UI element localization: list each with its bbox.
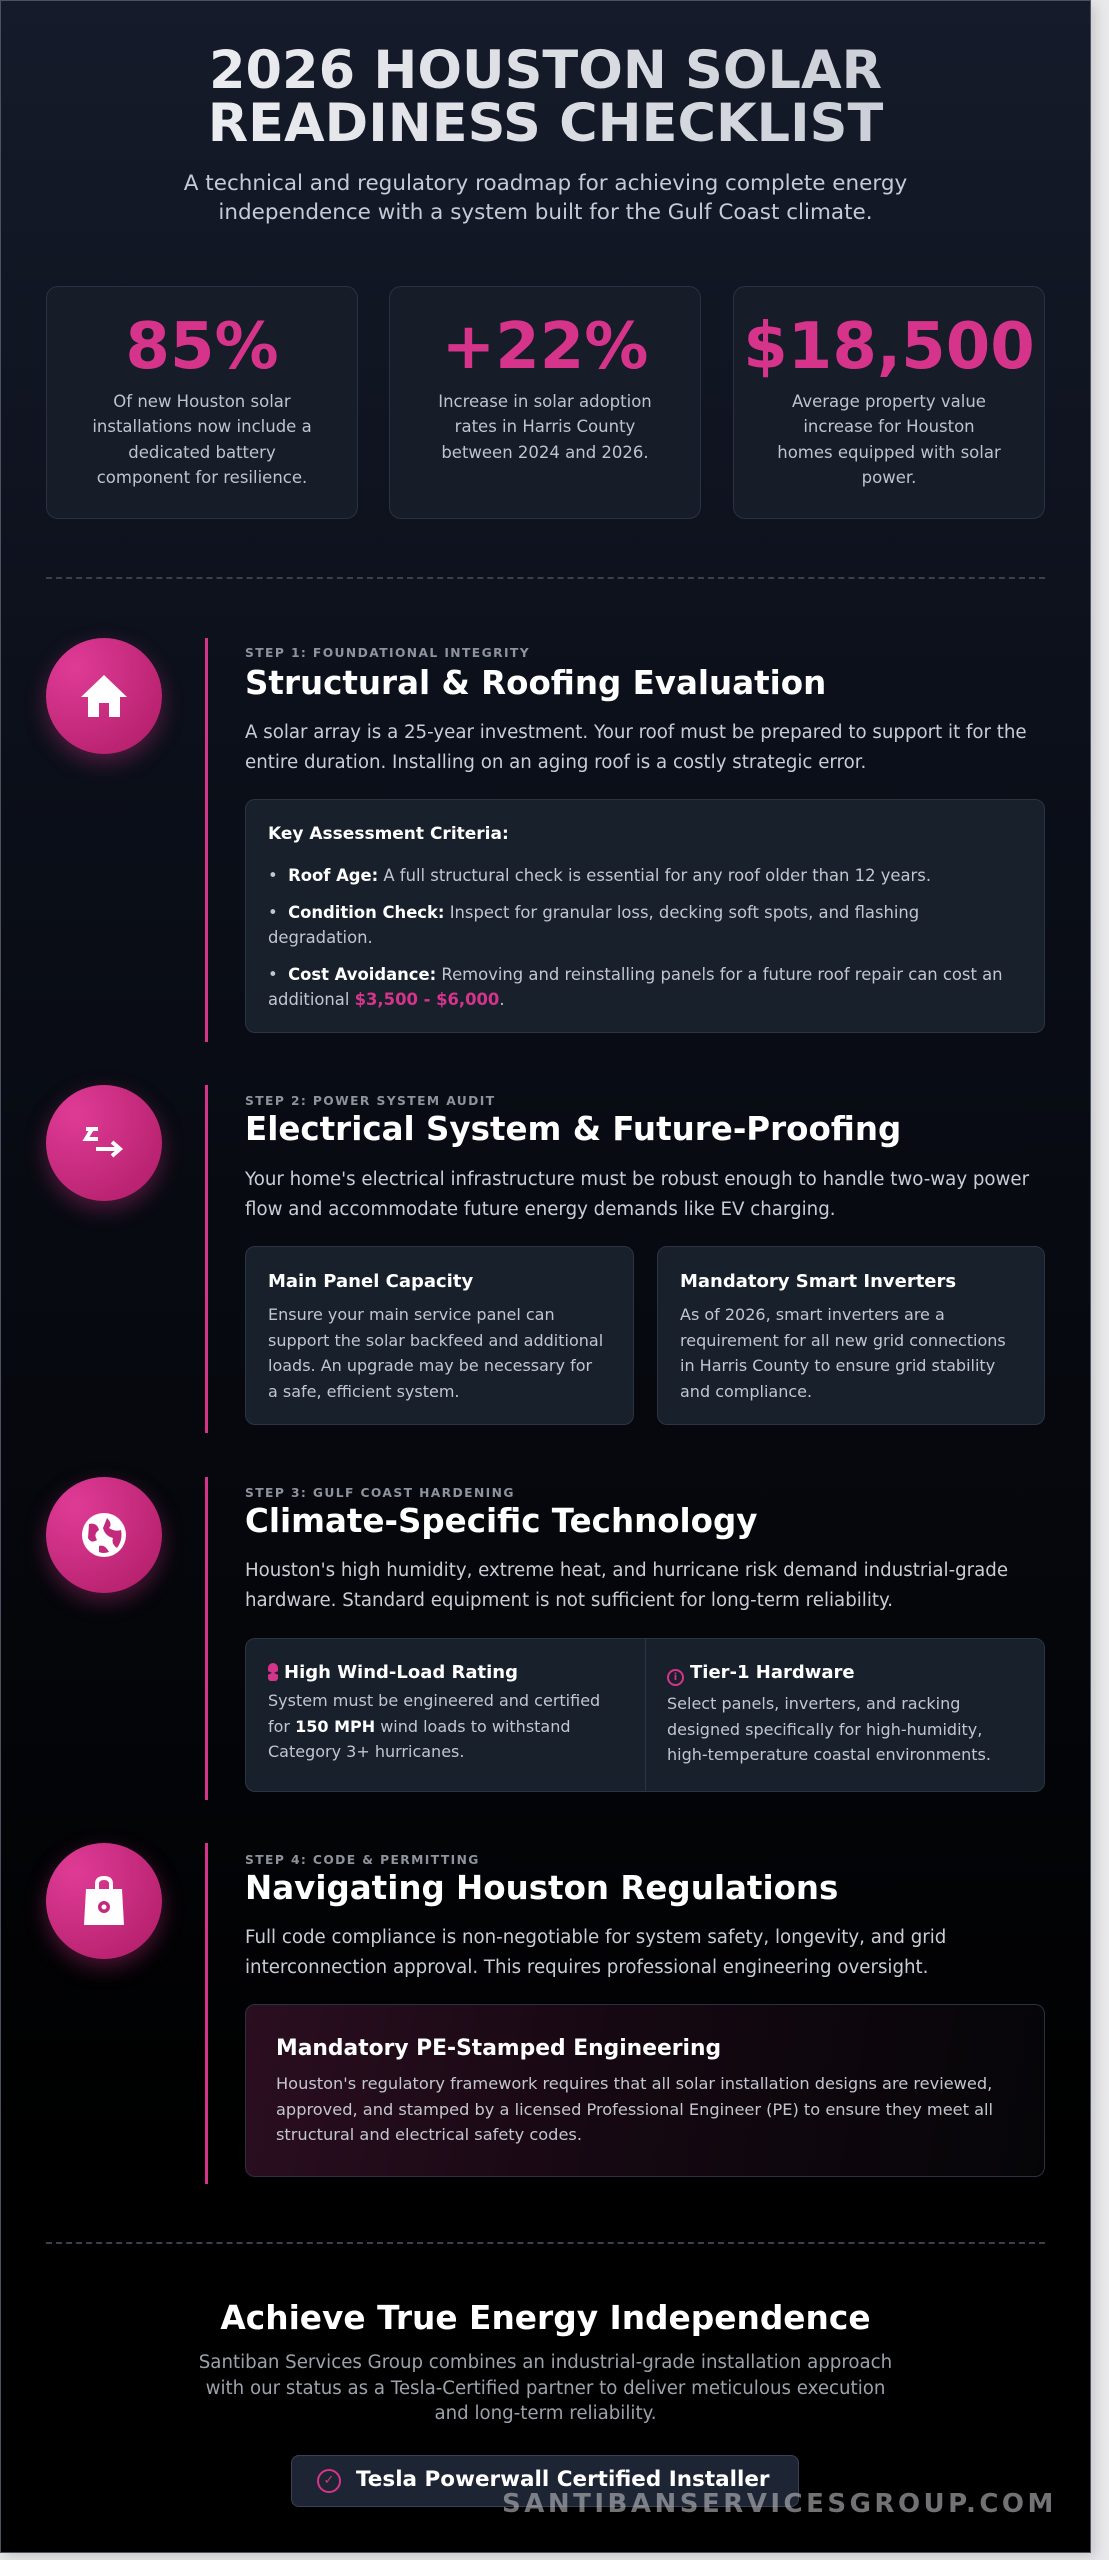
- callout: PE-stamped engineering: Houston's regulatory framework requires that all solar installation designs are reviewed, approved, and stamped by a licensed Professional Engineer (PE) to ensure they meet all structural and electrical safety codes.: [276, 2074, 993, 2144]
- wind-load item: High Wind-Load Rating: [284, 1662, 518, 1683]
- stat card: 85%: [46, 286, 358, 519]
- box: main panel capacity: Main Panel Capacity: [268, 1271, 473, 1292]
- icon: transfer arrows: [46, 1085, 162, 1201]
- stat card: 85%: Of new Houston solar: [113, 392, 291, 411]
- stat card: $18,500: power.: [862, 468, 916, 487]
- title: 2026 HOUSTON SOLAR: [209, 40, 882, 101]
- box: smart inverters: As of 2026, smart inverters are a requirement for all new grid connections in Harris County to ensure grid stability and compliance.: [680, 1305, 1006, 1400]
- wind-load item: System must be engineered and certified for 150 MPH wind loads to withstand Category 3+ hurricanes.: [268, 1691, 600, 1761]
- step 1 heading: Structural & Roofing Evaluation: [245, 664, 826, 702]
- tier-1 item: Select panels, inverters, and racking designed specifically for high-humidity, high-temperature coastal environments.: [667, 1694, 991, 1764]
- box: main panel capacity: loads. An upgrade may be necessary for: [268, 1356, 592, 1375]
- tier-1 item: Tier-1 Hardware: [690, 1662, 855, 1683]
- subtitle: A technical and regulatory roadmap for achieving complete energy independence with a system built for the Gulf Coast climate.: [184, 171, 907, 225]
- watermark: SANTIBANSERVICESGROUP.COM: [502, 2489, 1057, 2519]
- footer text: Santiban Services Group combines an industrial-grade installation approach with our status as a Tesla-Certified partner to deliver meticulous execution and long-term reliability.: [199, 2352, 892, 2424]
- stat card: +22%: +22%: [442, 310, 648, 384]
- title: [0, 44, 1091, 150]
- step 3 label: STEP 3: GULF COAST HARDENING: [245, 1486, 515, 1500]
- icon: globe: [46, 1477, 162, 1593]
- icon: shopping bag: [46, 1843, 162, 1959]
- stat card: +22%: Increase in solar adoption: [438, 392, 652, 411]
- callout: PE-stamped engineering: Mandatory PE-Stamped Engineering: [276, 2036, 721, 2061]
- box: main panel capacity: Ensure your main service panel can: [268, 1305, 555, 1324]
- step 2 label: STEP 2: POWER SYSTEM AUDIT: [245, 1094, 496, 1108]
- badge: Tesla certified: [291, 2455, 799, 2507]
- step 1 criteria box: [245, 799, 1045, 1033]
- step 1 criteria box: • Roof Age: A full structural check is essential for any roof older than 12 years.: [268, 866, 931, 885]
- stat card: 85%: 85%: [125, 310, 279, 384]
- stat card: $18,500: Average property value: [792, 392, 986, 411]
- stat card: +22%: between 2024 and 2026.: [441, 443, 649, 462]
- footer heading: Achieve True Energy Independence: [220, 2299, 871, 2337]
- stat card: $18,500: homes equipped with solar: [777, 443, 1001, 462]
- step 1 text: A solar array is a 25-year investment. Your roof must be prepared to support it for the entire duration. Installing on an aging roof is a costly strategic error.: [245, 722, 1027, 773]
- badge: Tesla certified: Tesla Powerwall Certified Installer: [356, 2467, 770, 2492]
- step 4 label: STEP 4: CODE & PERMITTING: [245, 1853, 480, 1867]
- stat card: 85%: dedicated battery: [128, 443, 276, 462]
- stat card: $18,500: increase for Houston: [803, 417, 975, 436]
- tier-1 item: i: [674, 1672, 677, 1683]
- box: smart inverters: [657, 1246, 1045, 1425]
- step 1 label: STEP 1: FOUNDATIONAL INTEGRITY: [245, 646, 530, 660]
- tier-1 item: [667, 1662, 991, 1764]
- callout: PE-stamped engineering: [245, 2004, 1045, 2177]
- step 3 text: Houston's high humidity, extreme heat, and hurricane risk demand industrial-grade hardware. Standard equipment is not sufficient for long-term reliability.: [245, 1560, 1008, 1611]
- step 3 heading: Climate-Specific Technology: [245, 1502, 757, 1540]
- step 1 criteria box: • Cost Avoidance: Removing and reinstalling panels for a future roof repair can cost an additional $3,500 - $6,000.: [268, 964, 1003, 1009]
- stat card: 85%: installations now include a: [92, 417, 312, 436]
- step 1 criteria box: • Condition Check: Inspect for granular loss, decking soft spots, and flashing degradation.: [268, 902, 919, 947]
- stat card: +22%: [389, 286, 701, 519]
- box: main panel capacity: [245, 1246, 634, 1425]
- box: main panel capacity: support the solar backfeed and additional: [268, 1330, 603, 1350]
- box: main panel capacity: a safe, efficient system.: [268, 1382, 460, 1400]
- stat card: +22%: rates in Harris County: [455, 417, 635, 436]
- step 2 text: Your home's electrical infrastructure must be robust enough to handle two-way power flow and accommodate future energy demands like EV charging.: [245, 1169, 1029, 1220]
- badge: Tesla certified: ✓: [324, 2473, 334, 2488]
- title: READINESS CHECKLIST: [208, 93, 883, 154]
- icon: home: [46, 638, 162, 754]
- stat card: 85%: component for resilience.: [97, 468, 307, 487]
- step 2 heading: Electrical System & Future-Proofing: [245, 1110, 901, 1148]
- box: climate hardware: [245, 1638, 1045, 1792]
- stat card: $18,500: $18,500: [743, 310, 1035, 384]
- step 4 heading: Navigating Houston Regulations: [245, 1869, 838, 1907]
- step 1 criteria box: Key Assessment Criteria:: [268, 824, 509, 844]
- box: smart inverters: Mandatory Smart Inverters: [680, 1271, 956, 1292]
- step 4 text: Full code compliance is non-negotiable for system safety, longevity, and grid interconnection approval. This requires professional engineering oversight.: [245, 1927, 946, 1978]
- stat card: $18,500: [733, 286, 1045, 519]
